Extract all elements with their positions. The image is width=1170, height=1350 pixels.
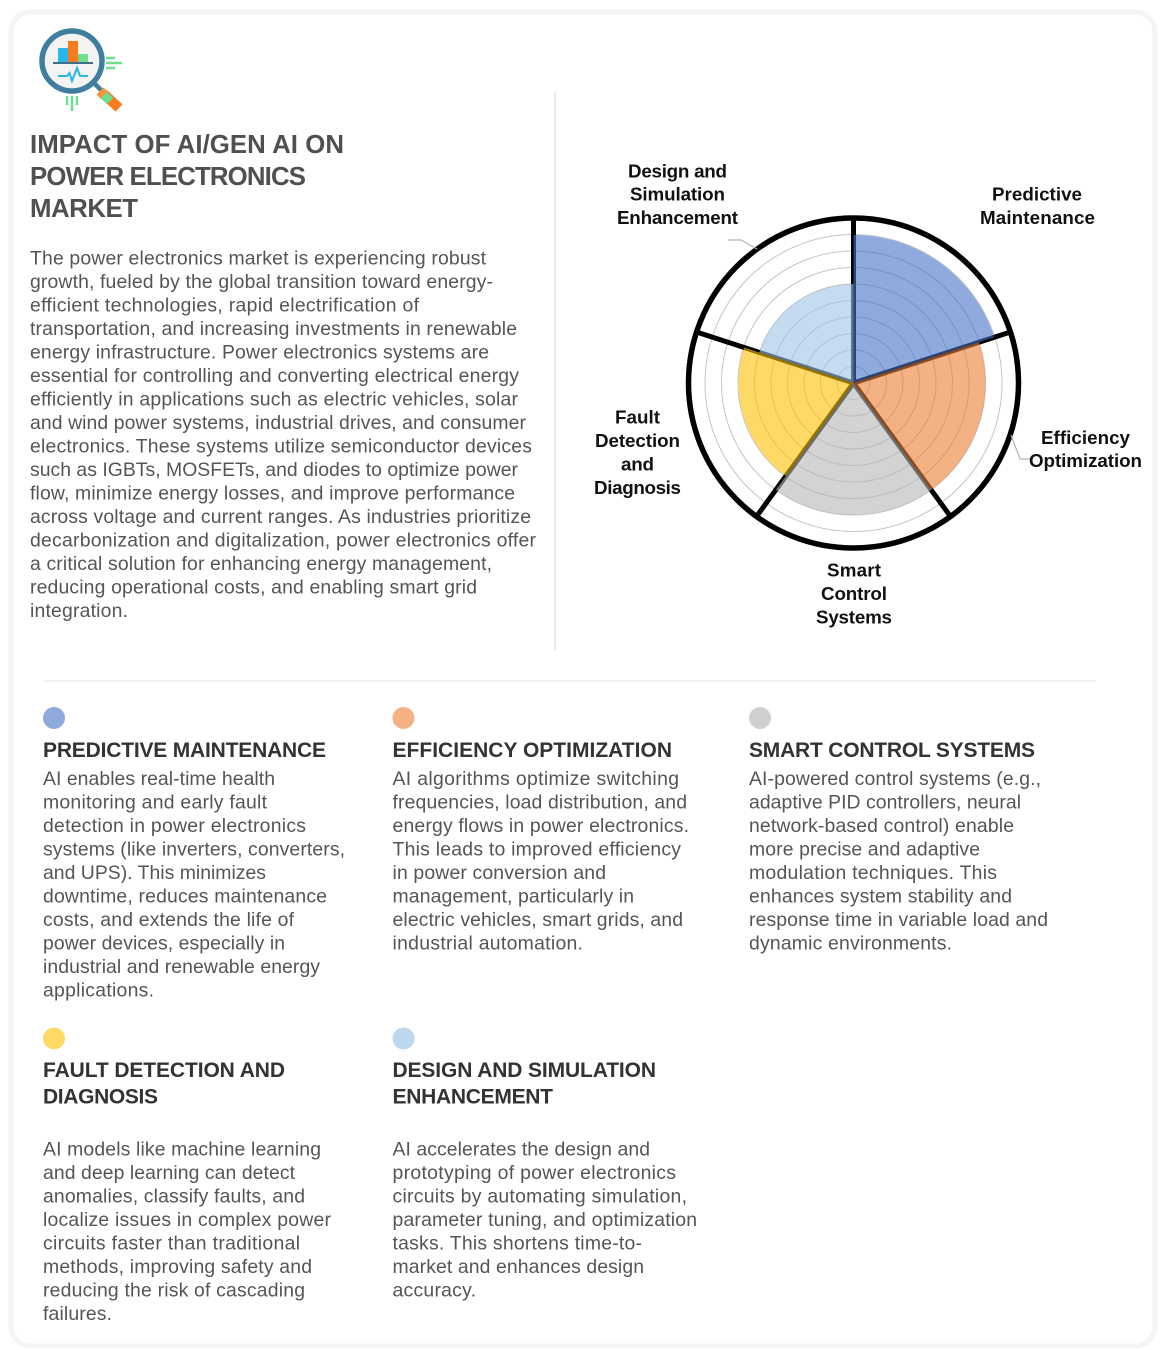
intro paragraph: decarbonization and digitalization, power electronics offer [30, 530, 537, 552]
chart label: fault detection and diagnosis: Diagnosis [594, 477, 681, 498]
title: MARKET [30, 195, 138, 223]
intro paragraph: reducing operational costs, and enabling smart grid [30, 576, 477, 598]
panel: efficiency optimization: energy flows in power electronics. [392, 815, 689, 837]
panel: efficiency optimization: in power conversion and [392, 862, 606, 884]
chart label: fault detection and diagnosis: and [621, 454, 654, 474]
panel: predictive maintenance: downtime, reduces maintenance [43, 886, 327, 908]
chart label: predictive maintenance: Predictive [992, 184, 1082, 204]
panel: design and simulation enhancement: AI accelerates the design and [392, 1138, 650, 1160]
panel: efficiency optimization: This leads to improved efficiency [392, 838, 681, 860]
title: POWER ELECTRONICS [30, 163, 306, 191]
chart label: fault detection and diagnosis: Fault [615, 406, 661, 428]
panel: smart control systems: modulation techniques. This [749, 862, 997, 884]
panel: efficiency optimization: AI algorithms optimize switching [392, 768, 679, 790]
intro paragraph: electronics. These systems utilize semiconductor devices [30, 436, 532, 458]
panel: design and simulation enhancement: tasks. This shortens time-to- [392, 1232, 642, 1254]
panel: fault detection and diagnosis: FAULT DETECTION AND [43, 1059, 285, 1082]
panel: predictive maintenance: systems (like inverters, converters, [43, 838, 345, 860]
panel: predictive maintenance: applications. [43, 980, 154, 1002]
panel: fault detection and diagnosis: anomalies, classify faults, and [43, 1186, 305, 1208]
panel: smart control systems: SMART CONTROL SYSTEMS [749, 739, 1035, 762]
panel: fault detection and diagnosis: reducing the risk of cascading [43, 1280, 305, 1302]
chart label: smart control systems: Control [821, 583, 887, 604]
panel: predictive maintenance: monitoring and early fault [43, 792, 268, 814]
intro paragraph [30, 248, 537, 622]
panel: design and simulation enhancement: market and enhances design [392, 1256, 644, 1278]
panel: efficiency optimization: industrial automation. [392, 932, 583, 954]
intro paragraph: a critical solution for enhancing energy management, [30, 553, 492, 575]
panel: fault detection and diagnosis: and deep learning can detect [43, 1162, 296, 1184]
intro paragraph: The power electronics market is experiencing robust [30, 248, 487, 270]
panel: predictive maintenance: detection in power electronics [43, 815, 306, 837]
panel: fault detection and diagnosis: failures. [43, 1303, 112, 1325]
panel: predictive maintenance: AI enables real-time health [43, 768, 275, 790]
wedge: efficiency optimization [854, 342, 985, 490]
intro paragraph: integration. [30, 600, 128, 622]
panel: design and simulation enhancement: ENHANCEMENT [392, 1086, 553, 1108]
chart label: fault detection and diagnosis [594, 406, 681, 498]
panel: fault detection and diagnosis: localize issues in complex power [43, 1209, 332, 1231]
chart label: design and simulation enhancement [617, 160, 739, 228]
leader lines [728, 240, 1030, 459]
panel: design and simulation enhancement: DESIGN AND SIMULATION [392, 1059, 656, 1082]
wedge: fault detection and diagnosis [738, 348, 854, 476]
icon: magnifying glass with chart [42, 31, 122, 111]
intro paragraph: flow, minimize energy losses, and improve performance [30, 482, 515, 504]
panel: predictive maintenance: and UPS). This minimizes [43, 862, 266, 884]
chart label: efficiency optimization: Optimization [1029, 450, 1142, 471]
panel: design and simulation enhancement: parameter tuning, and optimization [392, 1209, 697, 1231]
intro paragraph: growth, fueled by the global transition toward energy- [30, 271, 493, 293]
panel: fault detection and diagnosis [43, 1028, 332, 1325]
intro paragraph: efficiently in applications such as electric vehicles, solar [30, 388, 519, 410]
panel: predictive maintenance [43, 707, 345, 1002]
intro paragraph: efficient technologies, rapid electrification of [30, 294, 420, 316]
panel: efficiency optimization: frequencies, load distribution, and [392, 792, 687, 814]
chart spokes and outer ring [688, 218, 1018, 548]
intro paragraph: such as IGBTs, MOSFETs, and diodes to optimize power [30, 459, 519, 481]
panel: smart control systems: more precise and adaptive [749, 838, 980, 860]
panel: design and simulation enhancement [392, 1028, 697, 1302]
chart label: fault detection and diagnosis: Detection [595, 430, 680, 451]
panel: design and simulation enhancement: prototyping of power electronics [392, 1162, 676, 1184]
intro paragraph: and wind power systems, industrial drives, and consumer [30, 412, 527, 434]
panel: smart control systems [749, 707, 1048, 954]
chart label: smart control systems [816, 560, 892, 628]
panel: predictive maintenance: costs, and extends the life of [43, 909, 295, 931]
panel: fault detection and diagnosis: DIAGNOSIS [43, 1086, 158, 1108]
chart label: smart control systems: Smart [827, 560, 882, 580]
panel: efficiency optimization: electric vehicles, smart grids, and [392, 909, 683, 931]
panel: design and simulation enhancement: circuits by automating simulation, [392, 1186, 687, 1208]
panel: predictive maintenance: PREDICTIVE MAINTENANCE [43, 739, 326, 762]
panel: fault detection and diagnosis: methods, improving safety and [43, 1256, 312, 1278]
chart label: predictive maintenance [980, 184, 1095, 228]
panel: smart control systems: enhances system stability and [749, 886, 1012, 908]
panel: smart control systems: response time in variable load and [749, 909, 1048, 931]
chart label: smart control systems: Systems [816, 606, 892, 628]
panel: smart control systems: AI-powered control systems (e.g., [749, 768, 1041, 790]
title: IMPACT OF AI/GEN AI ON [30, 131, 344, 159]
polar area chart [688, 218, 1018, 548]
chart label: design and simulation enhancement: Simulation [630, 184, 725, 204]
panel: fault detection and diagnosis: AI models like machine learning [43, 1138, 321, 1160]
title [30, 131, 344, 223]
panel: design and simulation enhancement: accuracy. [392, 1280, 476, 1302]
intro paragraph: essential for controlling and converting electrical energy [30, 365, 519, 387]
wedge: design and simulation enhancement [759, 284, 854, 383]
chart label: predictive maintenance: Maintenance [980, 207, 1095, 228]
panel: predictive maintenance: industrial and renewable energy [43, 956, 320, 978]
wedge: smart control systems [776, 383, 931, 515]
panel: smart control systems: dynamic environments. [749, 932, 952, 954]
chart label: efficiency optimization: Efficiency [1041, 427, 1131, 448]
wedge: predictive maintenance [854, 235, 994, 383]
intro paragraph: across voltage and current ranges. As industries prioritize [30, 506, 531, 528]
chart label: efficiency optimization [1029, 427, 1142, 471]
panel: efficiency optimization [392, 707, 689, 954]
panel: smart control systems: adaptive PID controllers, neural [749, 792, 1021, 814]
panel: predictive maintenance: power devices, especially in [43, 932, 285, 954]
panel: efficiency optimization: EFFICIENCY OPTIMIZATION [392, 739, 672, 762]
intro paragraph: energy infrastructure. Power electronics systems are [30, 342, 489, 364]
panel: fault detection and diagnosis: circuits faster than traditional [43, 1232, 300, 1254]
panel: efficiency optimization: management, particularly in [392, 886, 634, 908]
chart label: design and simulation enhancement: Enhancement [617, 207, 739, 228]
chart label: design and simulation enhancement: Design and [628, 160, 727, 182]
panel: smart control systems: network-based control) enable [749, 815, 1014, 837]
intro paragraph: transportation, and increasing investments in renewable [30, 318, 517, 340]
